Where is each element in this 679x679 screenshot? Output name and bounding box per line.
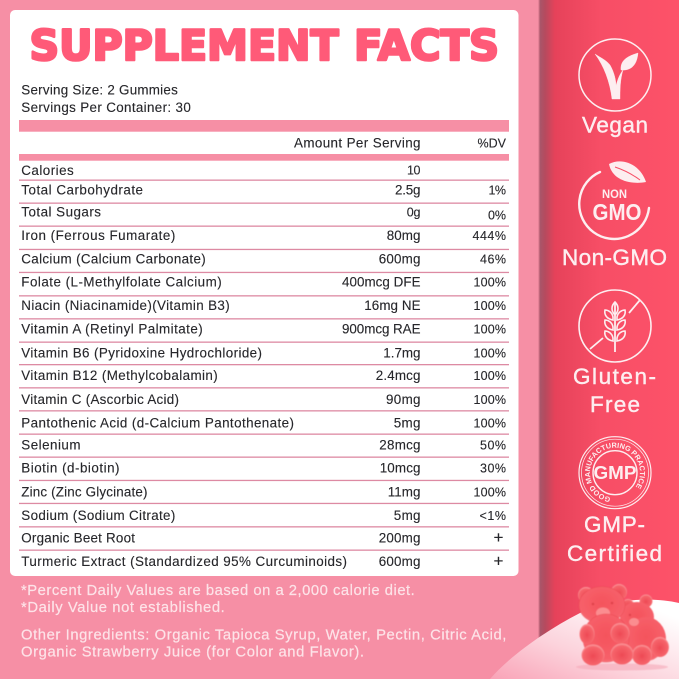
row: iron: 80mg (387, 228, 420, 243)
row: biotin: 30% (480, 462, 506, 476)
row: vitamin B6 (21, 345, 506, 360)
white curved hill (490, 600, 679, 679)
row: niacin: 100% (474, 299, 506, 313)
icon: GMP seal: GMP (594, 463, 636, 483)
row: selenium (21, 437, 506, 452)
table header: %DV (478, 136, 507, 150)
row: calories: Calories (21, 163, 74, 178)
row: vitamin C: Vitamin C (Ascorbic Acid) (21, 392, 179, 407)
serving information: Servings Per Container: 30 (21, 100, 191, 115)
row: calcium: 600mg (379, 251, 420, 266)
front bear (578, 584, 634, 666)
row: calcium (21, 251, 506, 266)
row: vitamin B6: 1.7mg (383, 345, 420, 360)
title: SUPPLEMENT (30, 21, 339, 70)
table bands (19, 120, 509, 161)
row: zinc: Zinc (Zinc Glycinate) (21, 485, 147, 500)
panel: supplement facts card (10, 10, 518, 576)
row: folate: Folate (L-Methylfolate Calcium) (21, 275, 222, 290)
row: vitamin A: 900mcg RAE (342, 322, 421, 337)
row: iron: 444% (472, 229, 506, 243)
row: turmeric extract (21, 551, 504, 570)
row: pantothenic acid: 100% (474, 416, 506, 430)
icon: gluten-free (579, 290, 651, 362)
table header (294, 135, 507, 150)
row: total carbohydrate: Total Carbohydrate (21, 183, 143, 198)
label: gluten-free: Gluten- (573, 364, 656, 389)
other ingredients (21, 627, 506, 661)
title: FACTS (354, 21, 499, 70)
row: zinc (21, 485, 506, 500)
row: organic beet root: 200mg (379, 530, 420, 545)
row: calories: 10 (407, 164, 421, 178)
row: vitamin B12 (21, 368, 506, 383)
row: sodium: 5mg (394, 508, 420, 523)
back bear (620, 594, 669, 665)
row: vitamin B12: 2.4mcg (376, 368, 420, 383)
row: organic beet root: + (494, 528, 504, 547)
panel: red certifications column (538, 0, 679, 679)
label: non-GMO: Non-GMO (562, 245, 667, 270)
row: sodium: Sodium (Sodium Citrate) (21, 508, 175, 523)
row: total carbohydrate (21, 182, 506, 198)
row: vitamin B12: Vitamin B12 (Methylcobalamin) (21, 368, 218, 383)
row: niacin: Niacin (Niacinamide)(Vitamin B3) (21, 298, 230, 313)
label: GMP-certified (567, 512, 662, 566)
other ingredients: Organic Strawberry Juice (for Color and Flavor). (21, 645, 364, 661)
row: turmeric extract: 600mg (379, 554, 420, 569)
row: organic beet root (21, 528, 504, 547)
table header: Amount Per Serving (294, 135, 420, 150)
row: vitamin B6: Vitamin B6 (Pyridoxine Hydrochloride) (21, 345, 262, 360)
row: vitamin A: Vitamin A (Retinyl Palmitate) (21, 322, 203, 337)
label: gluten-free: Free (590, 392, 640, 417)
row: turmeric extract: Turmeric Extract (Standardized 95% Curcuminoids) (21, 554, 347, 569)
row: pantothenic acid: 5mg (394, 415, 420, 430)
row: folate: 400mcg DFE (342, 275, 421, 290)
title (30, 21, 499, 70)
row: calcium: Calcium (Calcium Carbonate) (21, 251, 206, 266)
row: zinc: 11mg (388, 485, 420, 500)
label: gluten-free (573, 364, 656, 417)
row: vitamin A: 100% (474, 323, 506, 337)
row: biotin: Biotin (d-biotin) (21, 461, 119, 476)
row: total sugars: 0% (488, 208, 506, 222)
row: iron (21, 228, 506, 243)
row: pantothenic acid: Pantothenic Acid (d-Calcium Pantothenate) (21, 415, 294, 430)
row: selenium: 50% (480, 438, 506, 452)
row: total sugars: Total Sugars (21, 205, 101, 220)
row: folate (21, 275, 506, 290)
table row dividers (19, 180, 509, 551)
row: biotin: 10mcg (380, 461, 420, 476)
row: total carbohydrate: 1% (488, 184, 506, 198)
row: selenium: Selenium (21, 437, 80, 452)
icon: non-GMO: NON (602, 187, 627, 201)
row: vitamin B12: 100% (474, 369, 506, 383)
row: turmeric extract: + (494, 551, 504, 570)
illustration: gummy bears (576, 584, 669, 670)
row: vitamin A (21, 322, 506, 337)
row: niacin (21, 298, 506, 313)
row: niacin: 16mg NE (364, 298, 421, 313)
daily value footnotes: *Percent Daily Values are based on a 2,000 calorie diet. (21, 583, 415, 599)
row: pantothenic acid (21, 415, 506, 430)
icon: non-GMO (579, 161, 649, 239)
row: calcium: 46% (480, 252, 506, 266)
row: vitamin C: 90mg (386, 392, 420, 407)
row: selenium: 28mcg (379, 437, 420, 452)
label: vegan: Vegan (582, 113, 648, 138)
serving information (21, 82, 191, 115)
row: vitamin C: 100% (474, 393, 506, 407)
serving information: Serving Size: 2 Gummies (21, 82, 178, 97)
row: calories (21, 163, 421, 178)
row: total sugars: 0g (407, 206, 421, 220)
other ingredients: Other Ingredients: Organic Tapioca Syrup, Water, Pectin, Citric Acid, (21, 627, 506, 643)
row: biotin (21, 461, 506, 476)
row: vitamin C (21, 392, 506, 407)
row: sodium (21, 508, 506, 523)
row: total sugars (21, 205, 506, 222)
icon: non-GMO: GMO (592, 199, 642, 225)
daily value footnotes (21, 583, 415, 616)
row: sodium: <1% (480, 509, 506, 523)
label: GMP-certified: Certified (567, 541, 662, 566)
row: total carbohydrate: 2.5g (395, 182, 420, 198)
row: vitamin B6: 100% (474, 346, 506, 360)
row: folate: 100% (474, 276, 506, 290)
icon: GMP seal: GOOD MANUFACTURING PRACTICE (585, 442, 645, 502)
icon: vegan (579, 39, 651, 111)
label: GMP-certified: GMP- (584, 512, 645, 537)
row: iron: Iron (Ferrous Fumarate) (21, 228, 175, 243)
daily value footnotes: *Daily Value not established. (21, 600, 225, 616)
row: zinc: 100% (474, 486, 506, 500)
row: organic beet root: Organic Beet Root (21, 530, 135, 545)
